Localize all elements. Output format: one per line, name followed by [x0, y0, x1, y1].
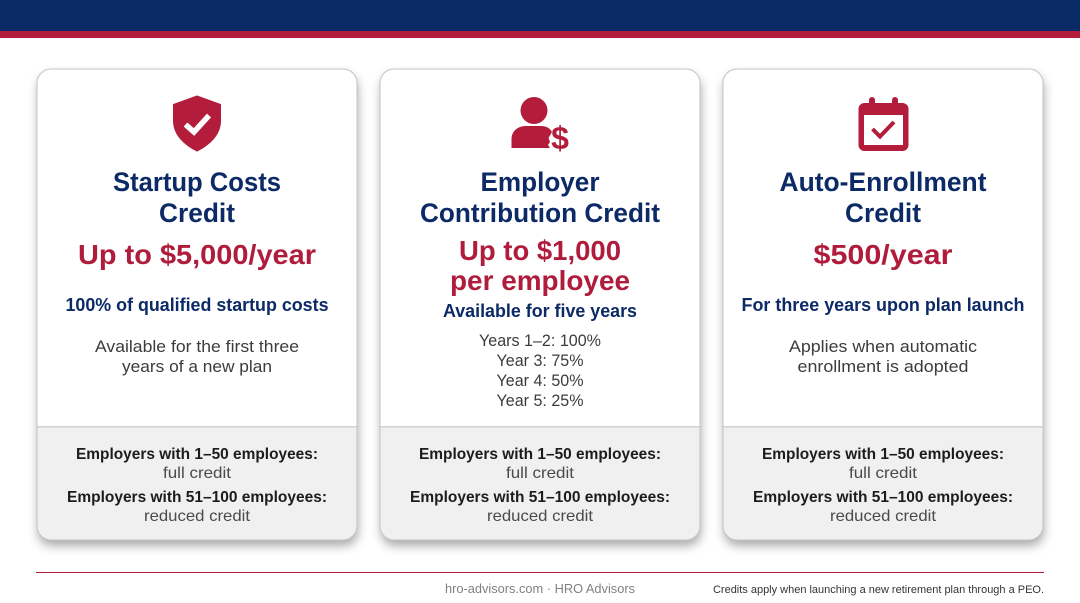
description: yearly schedule: Year 5: 25%	[496, 391, 584, 410]
description: yearly schedule: Year 3: 75%	[496, 351, 584, 370]
description: automatic enrollment: enrollment is adopted	[798, 357, 968, 376]
employer size note: reduced credit	[830, 508, 937, 525]
heading: employer contribution credit: Contribution Credit	[420, 198, 660, 228]
description: automatic enrollment	[789, 337, 978, 376]
heading: employer contribution credit	[420, 167, 660, 228]
icon: person with dollar sign: $	[551, 120, 569, 156]
description: automatic enrollment: Applies when automatic	[789, 337, 978, 356]
description: yearly schedule: Years 1–2: 100%	[479, 331, 601, 350]
heading: auto-enrollment credit	[780, 167, 987, 228]
subheading: available for five years: Available for five years	[443, 301, 637, 321]
panel: startup costs credit	[37, 69, 357, 540]
amount: up to $1,000 per employee	[450, 235, 630, 296]
heading: auto-enrollment credit: Auto-Enrollment	[780, 167, 987, 197]
icon: calendar with check	[858, 97, 908, 151]
employer size note: Employers with 51–100 employees:	[67, 489, 327, 506]
panel: employer contribution credit	[380, 69, 700, 540]
heading: startup costs credit	[113, 167, 281, 228]
employer size note: Employers with 1–50 employees:	[762, 446, 1004, 463]
employer size note: Employers with 1–50 employees:	[76, 446, 318, 463]
description: yearly schedule: Year 4: 50%	[496, 371, 584, 390]
amount: up to $1,000 per employee: Up to $1,000	[459, 235, 621, 266]
heading: startup costs credit: Credit	[159, 198, 235, 228]
employer size note: reduced credit	[144, 508, 251, 525]
heading: employer contribution credit: Employer	[480, 167, 600, 197]
footer source: hro-advisors.com · HRO Advisors	[445, 581, 635, 596]
description: availability: Available for the first three	[95, 337, 299, 356]
footer note: Credits apply when launching a new retirement plan through a PEO.	[713, 584, 1044, 596]
subheading: three years upon launch: For three years upon plan launch	[742, 295, 1024, 315]
employer size note: full credit	[849, 465, 918, 482]
icon: shield with check	[174, 96, 220, 151]
employer size note: full credit	[163, 465, 232, 482]
heading: startup costs credit: Startup Costs	[113, 167, 281, 197]
employer size note: reduced credit	[487, 508, 594, 525]
heading: auto-enrollment credit: Credit	[845, 198, 921, 228]
amount: up to $1,000 per employee: per employee	[450, 265, 630, 296]
employer size note: full credit	[506, 465, 575, 482]
employer size note: Employers with 51–100 employees:	[753, 489, 1013, 506]
description: availability	[95, 337, 299, 376]
header band	[0, 0, 1080, 38]
panel: auto-enrollment credit	[723, 69, 1043, 540]
employer size note	[410, 446, 670, 525]
employer size note	[753, 446, 1013, 525]
description: yearly schedule	[479, 331, 601, 410]
employer size note	[67, 446, 327, 525]
description: availability: years of a new plan	[122, 357, 272, 376]
amount: up to $5,000/year: Up to $5,000/year	[78, 239, 316, 270]
subheading: qualified startup costs: 100% of qualified startup costs	[66, 295, 328, 315]
employer size note: Employers with 51–100 employees:	[410, 489, 670, 506]
employer size note: Employers with 1–50 employees:	[419, 446, 661, 463]
amount: $500/year: $500/year	[814, 239, 953, 270]
icon: person with dollar sign	[512, 97, 569, 156]
